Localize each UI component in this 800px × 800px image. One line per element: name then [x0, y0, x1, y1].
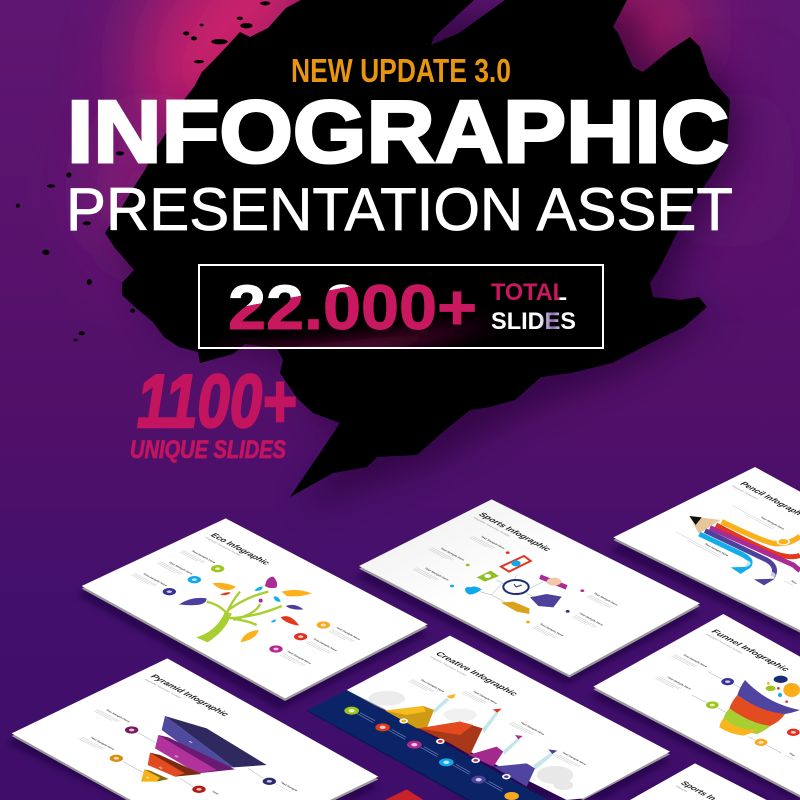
slide: funnel infographic: Text: [787, 752, 796, 757]
slide: sports infographic: Text Sample Here: [423, 567, 450, 581]
slide: pyramid infographic: Text: [211, 790, 220, 795]
slide: sports infographic: Sports Infographic: [476, 511, 554, 552]
slide: sports infographic second: [627, 763, 773, 800]
slide: sports infographic: Infographic Presentation Template: [472, 516, 512, 537]
slide: creative infographic: Creative Infographic: [433, 651, 521, 697]
slide: sports infographic: [355, 499, 700, 685]
slide: creative infographic: Text Sample Here: [472, 690, 499, 705]
slide: eco infographic: Text Sample Here: [286, 650, 313, 665]
icon: tree: [179, 577, 312, 642]
stat number: 22.000+: [228, 273, 477, 343]
callout: 1100+ unique slides: [130, 359, 296, 464]
brush shadow: [117, 10, 742, 507]
slide: creative infographic: Infographic Presentation Template: [429, 656, 468, 677]
stat label slides: SLIDES: [491, 308, 576, 335]
slide: sports infographic second: Infographic: [674, 785, 690, 793]
slide: creative infographic: Text Sample Here: [519, 721, 546, 736]
slide: pencil infographic: [610, 467, 800, 640]
slide: eco infographic: Infographic Presentation Template: [204, 536, 243, 557]
slide: pyramid infographic: Text Sample Here: [89, 736, 116, 751]
title: INFOGRAPHIC: [67, 82, 729, 181]
slide: sports infographic: Text Sample Here: [592, 592, 619, 606]
slide: pyramid infographic: Infographic Presentation Template: [143, 678, 183, 699]
slide: pyramid infographic: Text Sample: [279, 781, 299, 792]
title: eco: Eco Infographic: [208, 532, 273, 566]
slide: pyramid infographic: Pyramid Infographic: [148, 673, 232, 718]
slide: sports infographic: Text Sample Here: [578, 612, 605, 626]
slide: eco infographic: Text Sample Here: [335, 626, 362, 641]
slide: pencil infographic: Text: [789, 580, 798, 584]
slide: funnel infographic: Text Sample Here: [666, 676, 693, 690]
slide: eco infographic: Text Sample Here: [167, 561, 194, 575]
slide: creative infographic: [307, 636, 670, 800]
slide: sports infographic: Text Sample Here: [439, 547, 466, 561]
icon: mountains: [385, 694, 557, 787]
icon: pyramid: 03: [173, 755, 180, 758]
icon: pyramid: 02: [157, 766, 164, 770]
icon: pyramid: [141, 716, 267, 782]
wine swoosh inside box: [219, 316, 487, 347]
slide: creative infographic: Text Sample Here: [419, 679, 446, 693]
slide: funnel infographic: Text Sample Here: [682, 654, 709, 668]
slide: eco infographic: Text Sample Here: [312, 638, 339, 652]
icon: funnel: [719, 676, 800, 736]
icon: pyramid: 04: [187, 740, 194, 744]
slide: pyramid infographic: Text Sample Here: [104, 709, 131, 723]
callout: 1100+ unique slides: UNIQUE SLIDES: [130, 436, 286, 464]
black brush splash: [16, 0, 730, 497]
slide: eco infographic: Text Sample Here: [142, 573, 169, 587]
slide: creative infographic: Text Sample Here: [561, 751, 588, 766]
stat box: [199, 265, 603, 348]
icon: pyramid: 01: [144, 776, 151, 780]
slide: eco infographic: Text Sample Here: [190, 550, 217, 564]
slide: funnel infographic: Infographic Presentation Template: [705, 633, 744, 654]
callout: 1100+ unique slides: 1100+: [137, 359, 296, 443]
band: navy timeline: [307, 690, 548, 800]
slide: funnel infographic: [590, 614, 800, 800]
heading: new update: NEW UPDATE 3.0: [291, 52, 511, 89]
subtitle: PRESENTATION ASSET: [66, 176, 733, 243]
slide: sports infographic: Text Sample Here: [479, 535, 506, 550]
slide: eco infographic: [77, 518, 428, 710]
slide: funnel infographic: Funnel Infographic: [709, 628, 793, 673]
slide: pencil infographic: Text Sample Here: [759, 516, 786, 530]
stat label total: TOTAL: [491, 279, 567, 306]
slide: pencil infographic: Infographic Presentation: [731, 485, 760, 500]
slide: pyramid infographic: [7, 658, 423, 800]
slide: pencil infographic: Text Sample Here: [703, 543, 730, 557]
slide: sports infographic: Text Sample Here: [538, 623, 565, 637]
